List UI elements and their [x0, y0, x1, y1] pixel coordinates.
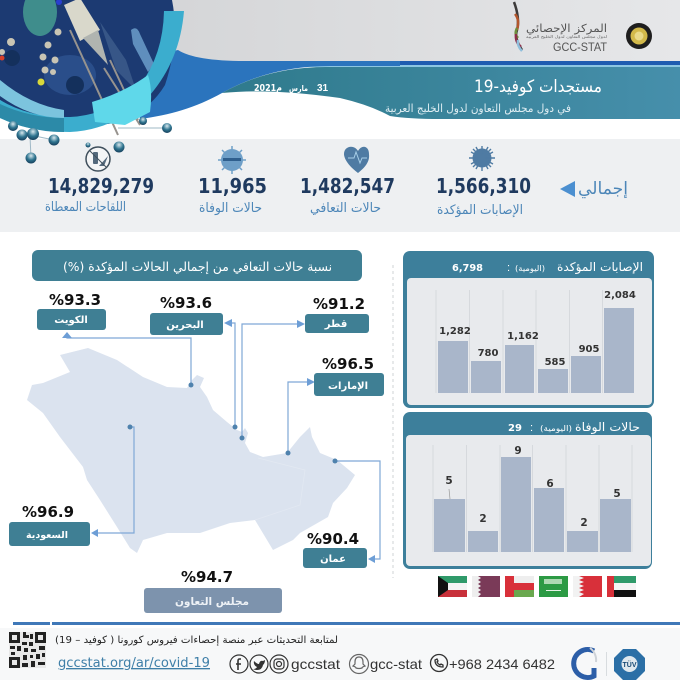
- country: Qatar: %91.2: [313, 295, 365, 313]
- panel heading: 6,798: [452, 263, 483, 274]
- country: Qatar: [305, 295, 369, 333]
- bar chart: 2: [479, 513, 487, 525]
- social icons: [230, 655, 288, 673]
- bar chart: 5: [445, 475, 453, 487]
- panel heading: [452, 260, 643, 275]
- country: UAE: %96.5: [322, 355, 374, 373]
- GCC-STAT logo: لدول مجلس التعاون لدول الخليج العربية: [526, 34, 607, 39]
- icon: heart: [344, 147, 369, 173]
- title: مستجدات كوفيد-19: [474, 77, 602, 97]
- country: Oman: %90.4: [307, 530, 359, 548]
- map of GCC: [27, 348, 355, 553]
- country: Saudi Arabia: السعودية: [26, 530, 68, 541]
- header title banner: 31: [317, 83, 329, 94]
- country: UAE: [314, 355, 384, 396]
- panel heading: 29: [508, 423, 522, 434]
- badge: TUV: [614, 649, 645, 680]
- GCC-STAT logo: المركز الإحصائي: [526, 22, 607, 35]
- handle gccstat: gccstat: [291, 656, 340, 672]
- footer: [0, 622, 680, 680]
- stat: deaths: حالات الوفاة: [199, 201, 262, 216]
- flag: Saudi Arabia: [539, 576, 568, 597]
- flag: Qatar: [472, 576, 500, 597]
- stat: vaccines: اللقاحات المعطاة: [45, 200, 126, 215]
- flag: Oman: [505, 576, 534, 597]
- country: Bahrain: %93.6: [160, 294, 212, 312]
- stat: deaths: 11,965: [198, 174, 267, 198]
- subtitle: في دول مجلس التعاون لدول الخليج العربية: [385, 102, 571, 115]
- country: Oman: عمان: [320, 554, 346, 565]
- country: Saudi Arabia: [9, 503, 90, 546]
- photo circle with syringe: [0, 0, 175, 135]
- connector arrowheads and dots: [62, 319, 375, 563]
- bar chart: 585: [545, 357, 565, 368]
- bar chart: 6: [546, 478, 554, 490]
- header title banner: مارس: [289, 84, 308, 94]
- phone number: +968 2434 6482: [449, 656, 555, 672]
- bar chart: [438, 290, 636, 393]
- country: Bahrain: البحرين: [166, 320, 204, 331]
- stat: deaths: [198, 146, 267, 216]
- panel heading: الإصابات المؤكدة: [557, 260, 643, 275]
- country: Saudi Arabia: %96.9: [22, 503, 74, 521]
- icon: virus: [469, 146, 495, 171]
- bar chart: 1,162: [507, 331, 539, 342]
- icon: snapchat: [350, 654, 368, 674]
- flag: Bahrain: [573, 576, 602, 597]
- stat: confirmed: [436, 146, 531, 218]
- country: Kuwait: %93.3: [49, 291, 101, 309]
- country: Oman: [303, 530, 367, 568]
- flag: Kuwait: [438, 576, 467, 597]
- bar chart: 2: [580, 517, 588, 529]
- handle gcc-stat: gcc-stat: [370, 656, 422, 672]
- stats band: [0, 139, 680, 232]
- panel: daily deaths: [403, 412, 652, 569]
- country: Qatar: قطر: [324, 319, 347, 330]
- bar chart: 780: [478, 348, 498, 359]
- bar chart: 2,084: [604, 290, 636, 301]
- stat: confirmed: الإصابات المؤكدة: [437, 203, 523, 218]
- panel heading: حالات الوفاة: [575, 420, 640, 435]
- bar chart: 1,282: [439, 326, 471, 337]
- header top band: [0, 0, 680, 67]
- stat: recoveries: [300, 147, 395, 216]
- country: Kuwait: الكويت: [54, 315, 88, 326]
- GCC total: %94.7: [181, 568, 233, 586]
- teal ring around photo: [0, 11, 184, 132]
- panel heading: (اليومية): [540, 424, 572, 433]
- panel heading: :: [530, 422, 533, 434]
- total label: إجمالي: [578, 179, 628, 199]
- icon: vaccine: [86, 147, 110, 171]
- connector lines: [67, 323, 380, 559]
- badge: TUV: TÜV: [622, 660, 637, 669]
- country: Bahrain: [150, 294, 223, 335]
- molecule decoration: [8, 117, 172, 164]
- follow text: لمتابعة التحديثات عبر منصة إحصاءات فيروس كورونا ( كوفيد – 19): [55, 635, 338, 646]
- icon: whatsapp: [430, 654, 448, 672]
- header blue wave: [130, 50, 400, 119]
- bar chart: 5: [613, 488, 621, 500]
- website link: gccstat.org/ar/covid-19: [58, 655, 210, 671]
- bar chart: [434, 445, 631, 552]
- date: 2021م: [254, 83, 282, 94]
- flags: [438, 576, 636, 597]
- dashed divider: [392, 265, 394, 578]
- panel heading: (اليومية): [515, 264, 545, 273]
- country: Kuwait: [37, 291, 106, 330]
- panel heading: :: [507, 262, 510, 274]
- bar chart: 9: [514, 445, 522, 457]
- panel heading: [508, 420, 640, 435]
- flag: UAE: [607, 576, 636, 597]
- stat: confirmed: 1,566,310: [436, 174, 531, 198]
- country: UAE: الإمارات: [328, 381, 368, 392]
- map heading: [32, 250, 362, 281]
- GCC total: [144, 568, 282, 613]
- icon: virus with bed: [218, 146, 246, 174]
- stat: recoveries: حالات التعافي: [310, 201, 381, 216]
- map heading: نسبة حالات التعافي من إجمالي الحالات المؤكدة (%): [63, 259, 332, 275]
- badge: ISO: [574, 648, 596, 678]
- GCC total: مجلس التعاون: [175, 596, 249, 608]
- stat: vaccines: [45, 147, 154, 215]
- panel: daily confirmed cases: [403, 251, 654, 408]
- GCC-STAT logo: [514, 2, 652, 54]
- stat: recoveries: 1,482,547: [300, 174, 395, 198]
- QR code: [9, 632, 46, 668]
- stat: vaccines: 14,829,279: [48, 174, 154, 198]
- GCC-STAT logo: GCC-STAT: [553, 40, 608, 54]
- header title banner: [222, 67, 680, 119]
- bar chart: 905: [579, 344, 599, 355]
